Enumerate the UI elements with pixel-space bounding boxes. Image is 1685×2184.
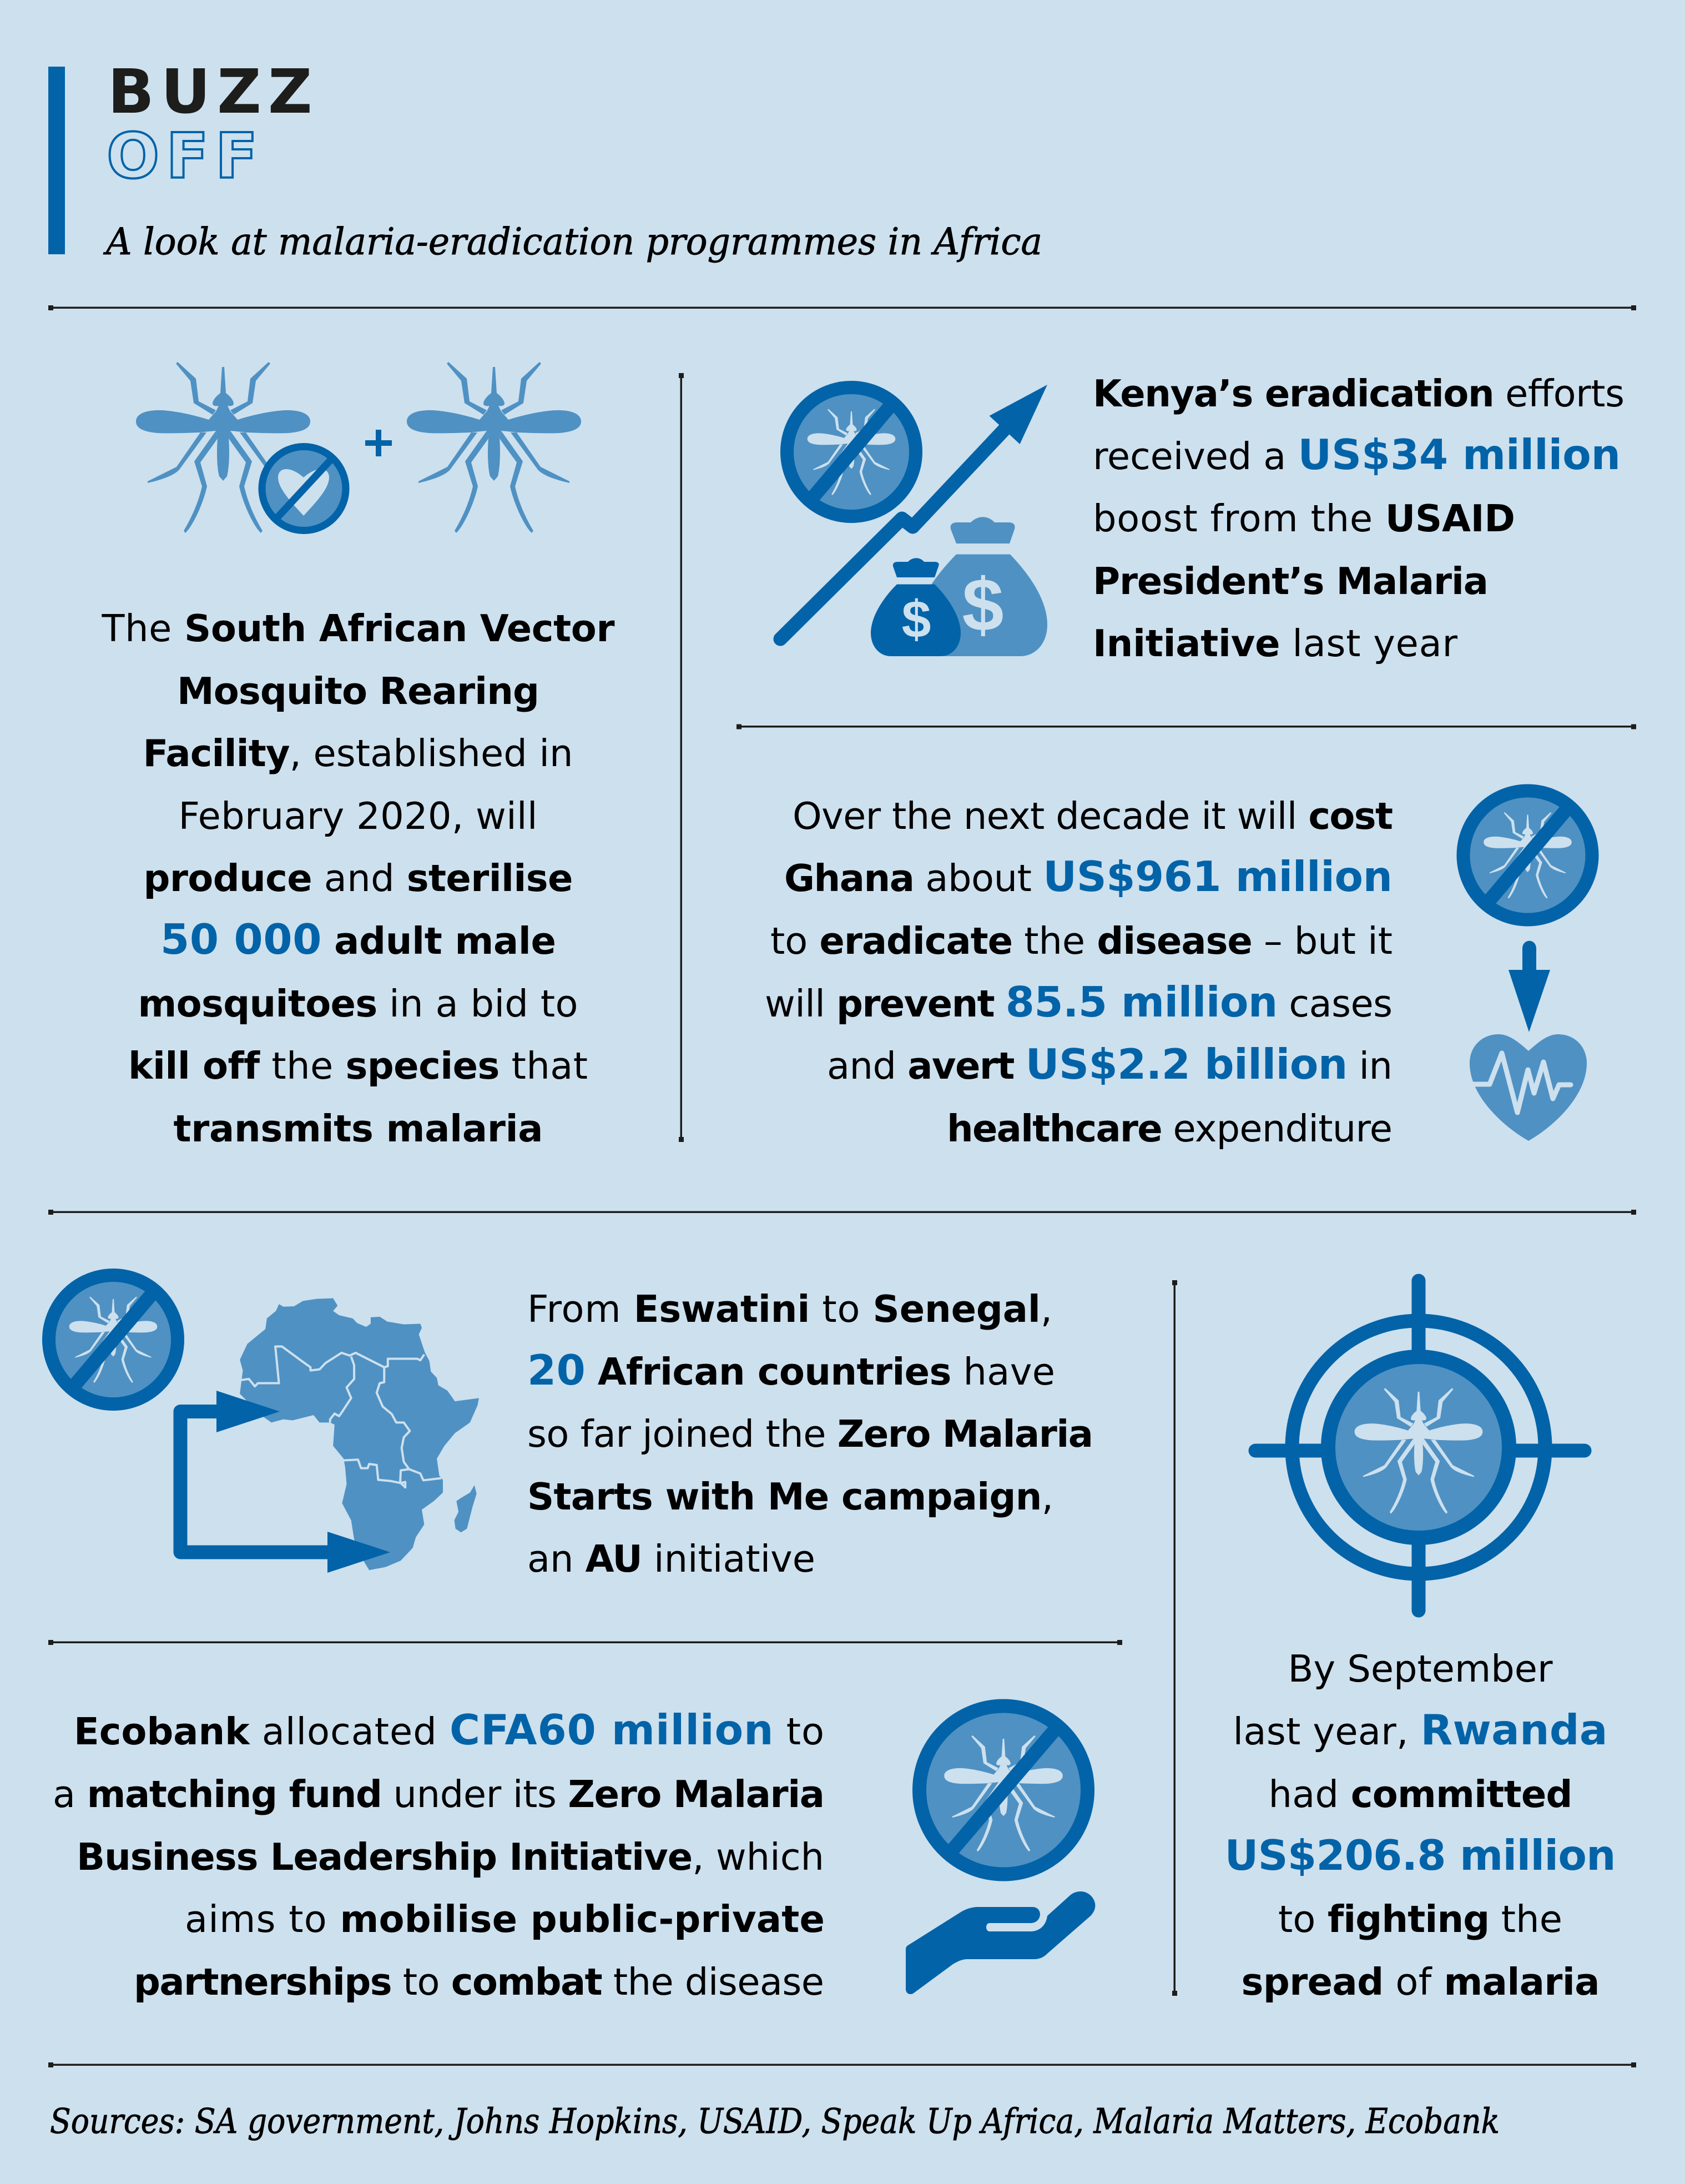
title: off: OFF — [107, 120, 264, 193]
icon: no mosquito, down arrow, heart — [1463, 791, 1592, 1141]
icon: small money bag — [871, 558, 961, 656]
icon: open hand — [906, 1891, 1095, 1994]
icon: target on mosquito — [1255, 1281, 1585, 1611]
sources: Sources: SA government, Johns Hopkins, USAID, Speak Up Africa, Malaria Matters, Ecobank — [50, 2101, 1500, 2141]
text: Ghana cost and savings: healthcare expenditure — [947, 1107, 1393, 1150]
text: Ghana cost and savings: and avert US$2.2 billion in — [827, 1040, 1393, 1089]
icon: hand holding no mosquito — [906, 1706, 1095, 1994]
panel: Rwanda — [1224, 1281, 1616, 2004]
text: South African Vector Mosquito Rearing Facility — [101, 607, 614, 1150]
text: Zero Malaria Starts with Me: From Eswatini to Senegal, — [527, 1287, 1052, 1331]
text: Ghana cost and savings: will prevent 85.5 million cases — [765, 978, 1393, 1026]
text: South African Vector Mosquito Rearing Facility: mosquitoes in a bid to — [138, 982, 578, 1025]
icon: two mosquitoes, sterile male plus mosquito — [136, 362, 581, 533]
text: South African Vector Mosquito Rearing Facility: produce and sterilise — [143, 857, 573, 900]
text: South African Vector Mosquito Rearing Facility: Facility, established in — [143, 732, 573, 775]
icon: no mosquito, rising arrow and money bags — [780, 385, 1047, 656]
panel: South African mosquito facility — [101, 362, 614, 1150]
arrow: rising trend — [780, 385, 1047, 639]
text: Ecobank matching fund: partnerships to combat the disease — [134, 1960, 824, 2004]
text: Ecobank matching fund: Business Leadership Initiative, which — [77, 1835, 824, 1879]
text: Zero Malaria Starts with Me: so far joined the Zero Malaria — [527, 1412, 1093, 1456]
text: Kenya funding — [1093, 372, 1625, 665]
panel: Kenya — [780, 372, 1625, 665]
text: Ecobank matching fund — [53, 1705, 824, 2004]
icon: no mosquito — [787, 388, 916, 516]
text: Ghana cost and savings: to eradicate the disease – but it — [770, 919, 1393, 963]
text: Rwanda commitment: had committed — [1269, 1773, 1572, 1816]
text: Ecobank matching fund: aims to mobilise public-private — [185, 1898, 824, 1941]
text: Ghana cost and savings: Ghana about US$961 million — [784, 852, 1393, 901]
accent bar — [48, 67, 65, 254]
icon: no heart badge — [262, 446, 346, 531]
text: Rwanda commitment: spread of malaria — [1241, 1960, 1600, 2004]
text: Zero Malaria Starts with Me: Starts with Me campaign, — [527, 1475, 1053, 1518]
text: Kenya funding: Kenya’s eradication efforts — [1093, 372, 1625, 415]
header — [48, 56, 1042, 263]
arrow: bracket pointing at Senegal and Eswatini — [180, 1391, 390, 1573]
icon: no mosquito — [49, 1275, 178, 1404]
text: Rwanda commitment: to fighting the — [1278, 1898, 1562, 1941]
text: Rwanda commitment: US$206.8 million — [1224, 1831, 1616, 1880]
text: South African Vector Mosquito Rearing Facility: The South African Vector — [101, 607, 614, 650]
panel: Ghana — [765, 791, 1592, 1150]
text: Ecobank matching fund: a matching fund under its Zero Malaria — [53, 1773, 824, 1816]
panel: Ecobank — [53, 1705, 1095, 2004]
text: Kenya funding: received a US$34 million — [1093, 430, 1621, 479]
panel: Zero Malaria campaign — [49, 1275, 1093, 1581]
text: South African Vector Mosquito Rearing Facility: February 2020, will — [179, 794, 537, 838]
text glyph: small dollar: $ — [902, 590, 931, 649]
text: Rwanda commitment: By September — [1288, 1647, 1553, 1690]
text: Rwanda commitment: last year, Rwanda — [1233, 1705, 1607, 1754]
subtitle: A look at malaria-eradication programmes in Africa — [103, 220, 1042, 263]
text: Zero Malaria Starts with Me — [527, 1287, 1093, 1581]
text: Kenya funding: Initiative last year — [1093, 622, 1457, 665]
text glyph: large dollar: $ — [962, 563, 1004, 647]
text: Kenya funding: boost from the USAID — [1093, 497, 1515, 540]
text: Zero Malaria Starts with Me: 20 African countries have — [527, 1346, 1055, 1395]
text: South African Vector Mosquito Rearing Facility: kill off the species that — [128, 1044, 588, 1088]
text: Ghana cost and savings — [765, 794, 1393, 1150]
text: Zero Malaria Starts with Me: an AU initiative — [527, 1537, 815, 1581]
text: South African Vector Mosquito Rearing Facility: Mosquito Rearing — [177, 670, 539, 713]
text: Ghana cost and savings: Over the next decade it will cost — [793, 794, 1393, 838]
text: South African Vector Mosquito Rearing Facility: 50 000 adult male — [160, 915, 556, 964]
icon: no mosquito — [919, 1706, 1088, 1874]
plus sign — [365, 430, 392, 456]
text: Kenya funding: President’s Malaria — [1093, 560, 1488, 603]
title: buzz: BUZZ — [108, 56, 319, 127]
text: South African Vector Mosquito Rearing Facility: transmits malaria — [173, 1107, 543, 1150]
icon: no mosquito — [1463, 791, 1592, 919]
icon: large money bag — [931, 517, 1047, 656]
icon: heart with pulse line — [1470, 1034, 1587, 1141]
text: Rwanda commitment — [1224, 1647, 1616, 2004]
arrow: down — [1509, 941, 1550, 1032]
text: Ecobank matching fund: Ecobank allocated CFA60 million to — [74, 1705, 824, 1754]
map: Africa with borders — [240, 1298, 479, 1570]
